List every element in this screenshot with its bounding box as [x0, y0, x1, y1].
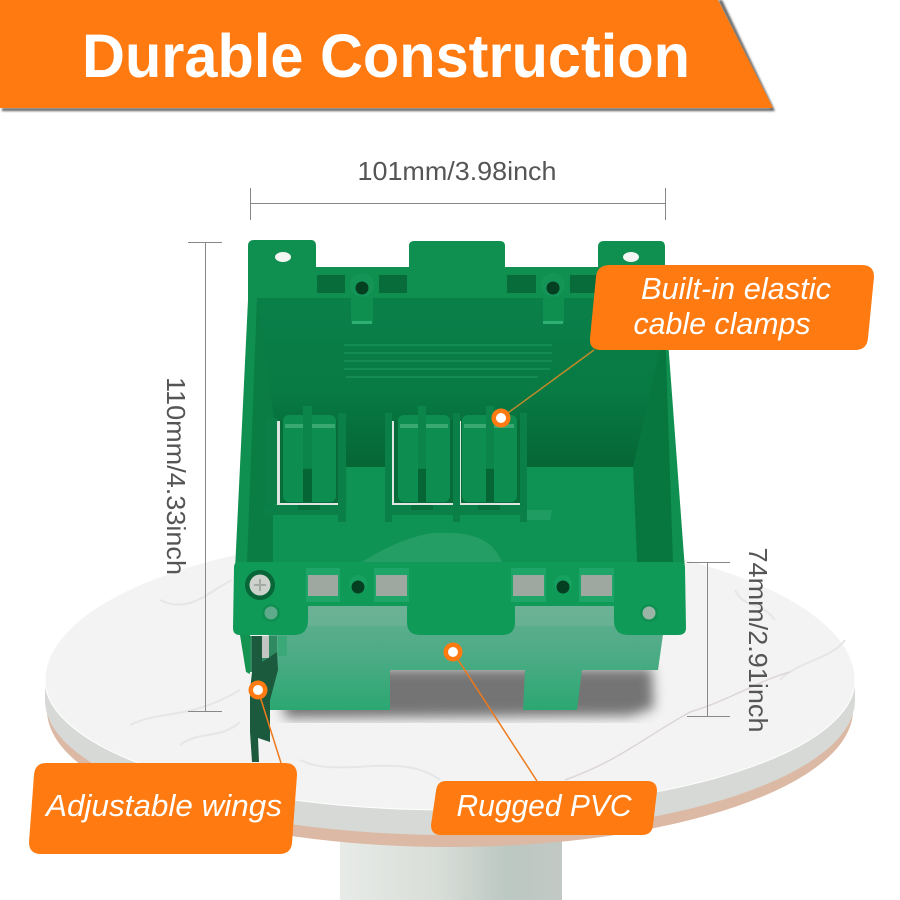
- callout marker: rugged PVC: [444, 642, 462, 662]
- title banner: [0, 0, 775, 111]
- callout: rugged PVC: [431, 781, 657, 835]
- pedestal: [340, 835, 562, 900]
- depth dimension: 74mm/2.91inch: [743, 548, 773, 732]
- height dimension: [161, 242, 222, 712]
- callout marker: cable clamps: [492, 408, 510, 428]
- callout: built-in elastic cable clamps: Built-in elastic: [641, 271, 831, 306]
- marble top: [45, 532, 855, 810]
- product: green electrical box: [233, 240, 686, 762]
- box shadow: [280, 668, 654, 718]
- back wall: [257, 298, 664, 467]
- depth dimension: [687, 548, 773, 732]
- rear screw posts: [351, 298, 564, 324]
- cable clamp right: [453, 406, 527, 522]
- callout marker: adjustable wings: [248, 680, 268, 700]
- title: Durable Construction: [82, 22, 690, 90]
- callout: built-in elastic cable clamps: [590, 265, 874, 350]
- width dimension: [250, 156, 666, 220]
- lower front wall: [268, 606, 667, 710]
- box outer shell and rear flange: [235, 240, 685, 600]
- back wall ribs: [344, 345, 552, 377]
- copper rim: [47, 700, 853, 847]
- callout: rugged PVC: Rugged PVC: [456, 788, 632, 823]
- floor: [273, 467, 637, 562]
- screw: [245, 570, 275, 600]
- callout: adjustable wings: [29, 763, 297, 854]
- front flange holes: [349, 575, 572, 594]
- window frames: [306, 568, 614, 602]
- grey edge: [45, 680, 855, 835]
- front flange windows: [308, 575, 612, 596]
- cable clamp middle: [385, 406, 453, 522]
- side walls: [247, 298, 276, 562]
- front flange: [233, 562, 686, 635]
- rear slots: [317, 275, 598, 293]
- rear holes: [350, 273, 565, 297]
- callout: built-in elastic cable clamps: cable clamps: [634, 306, 810, 341]
- flange corner dimples: [262, 604, 658, 622]
- cable clamp left: [264, 406, 346, 522]
- marble table: [45, 532, 855, 900]
- callout: adjustable wings: Adjustable wings: [44, 788, 282, 823]
- height dimension: 110mm/4.33inch: [161, 377, 191, 575]
- mounting holes in rear flange: [275, 252, 639, 262]
- adjustable wing mechanism: [240, 635, 287, 762]
- leader lines: [258, 350, 594, 781]
- width dimension: 101mm/3.98inch: [358, 156, 556, 186]
